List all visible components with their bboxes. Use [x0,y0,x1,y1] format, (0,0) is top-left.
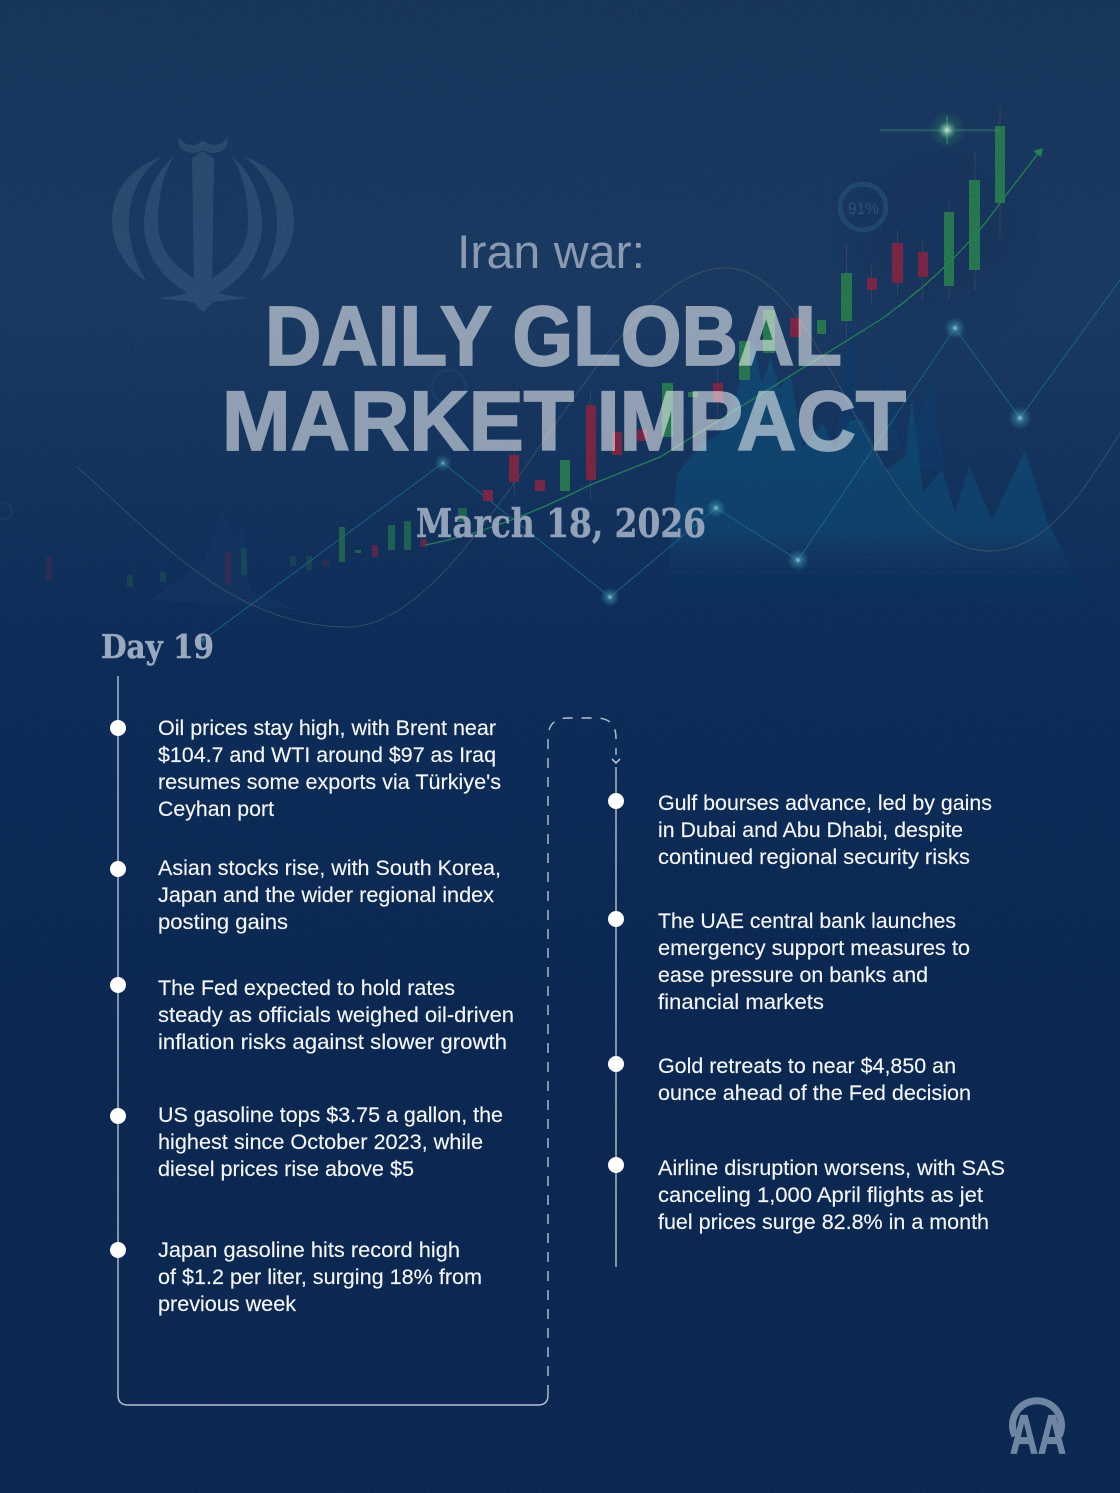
bullet: gold: Gold retreats to near $4,850 an [658,1054,956,1078]
dark shade behind candles [850,155,1020,315]
panel: left column bullets [110,716,514,1316]
teal network line [196,280,1120,647]
headline: MARKET IMPACT [222,374,906,468]
glow star [880,111,1000,149]
bullet: Gulf bourses: in Dubai and Abu Dhabi, despite [658,818,963,842]
bullet: US gasoline: US gasoline tops $3.75 a gallon, the [158,1103,503,1127]
rising trend arrow [425,148,1043,545]
bullet: oil prices: $104.7 and WTI around $97 as Iraq [158,743,496,767]
bullet: US gasoline: diesel prices rise above $5 [158,1157,414,1181]
wave line [77,268,1120,627]
bullet: the Fed: steady as officials weighed oil-driven [158,1003,514,1027]
bullet: oil prices: Oil prices stay high, with Brent near [158,716,496,740]
icon: AA logo: AA [1010,1403,1066,1465]
bullet: the Fed: The Fed expected to hold rates [158,976,455,1000]
bullet: gold [608,1054,971,1105]
bullet: Asian stocks: Japan and the wider regional index [158,883,494,907]
bullet: oil prices: Ceyhan port [158,797,274,821]
bullet: Japan gasoline [110,1238,482,1316]
bullet: oil prices [110,716,501,821]
bullet: airlines [608,1156,1005,1234]
percentage gauges [0,184,886,519]
bullet: US gasoline [110,1103,503,1181]
headline [222,289,906,468]
heading: Day 19: Day 19 [101,627,214,666]
date: March 18, 2026 [416,501,706,547]
bullet: the Fed: inflation risks against slower growth [158,1030,507,1054]
bullet: UAE central bank: financial markets [658,990,824,1014]
title block [222,225,906,547]
bullet: airlines: fuel prices surge 82.8% in a month [658,1210,989,1234]
bullet: airlines: canceling 1,000 April flights as jet [658,1183,983,1207]
bullet: UAE central bank: ease pressure on banks and [658,963,928,987]
bullet: US gasoline: highest since October 2023, while [158,1130,483,1154]
bullet: Asian stocks: posting gains [158,910,288,934]
bullet: the Fed [110,976,514,1054]
bullet: Asian stocks [110,856,501,934]
timeline connector [118,676,620,1405]
bullet: Japan gasoline: Japan gasoline hits record high [158,1238,460,1262]
headline: DAILY GLOBAL [265,289,842,383]
bullet: Gulf bourses: continued regional security risks [658,845,970,869]
bullet: Gulf bourses: Gulf bourses advance, led by gains [658,791,992,815]
bullet: UAE central bank [608,909,970,1014]
candlesticks [46,108,1005,587]
bullet: UAE central bank: The UAE central bank launches [658,909,956,933]
bullet: Japan gasoline: previous week [158,1292,296,1316]
panel: right column bullets [608,791,1005,1234]
bullet: Asian stocks: Asian stocks rise, with South Korea, [158,856,501,880]
bullet: Gulf bourses [608,791,992,869]
bullet: gold: ounce ahead of the Fed decision [658,1081,971,1105]
chart backdrop [0,108,1120,647]
mountain area chart [150,320,1095,610]
bullet: airlines: Airline disruption worsens, with SAS [658,1156,1005,1180]
icon: Iran emblem [112,136,294,312]
icon: AA logo [1010,1401,1066,1465]
bullet: oil prices: resumes some exports via Türkiye's [158,770,501,794]
kicker: Iran war: Iran war: [457,225,645,278]
percentage gauges: 91% [848,199,879,218]
bullet: Japan gasoline: of $1.2 per liter, surging 18% from [158,1265,482,1289]
bullet: UAE central bank: emergency support measures to [658,936,970,960]
